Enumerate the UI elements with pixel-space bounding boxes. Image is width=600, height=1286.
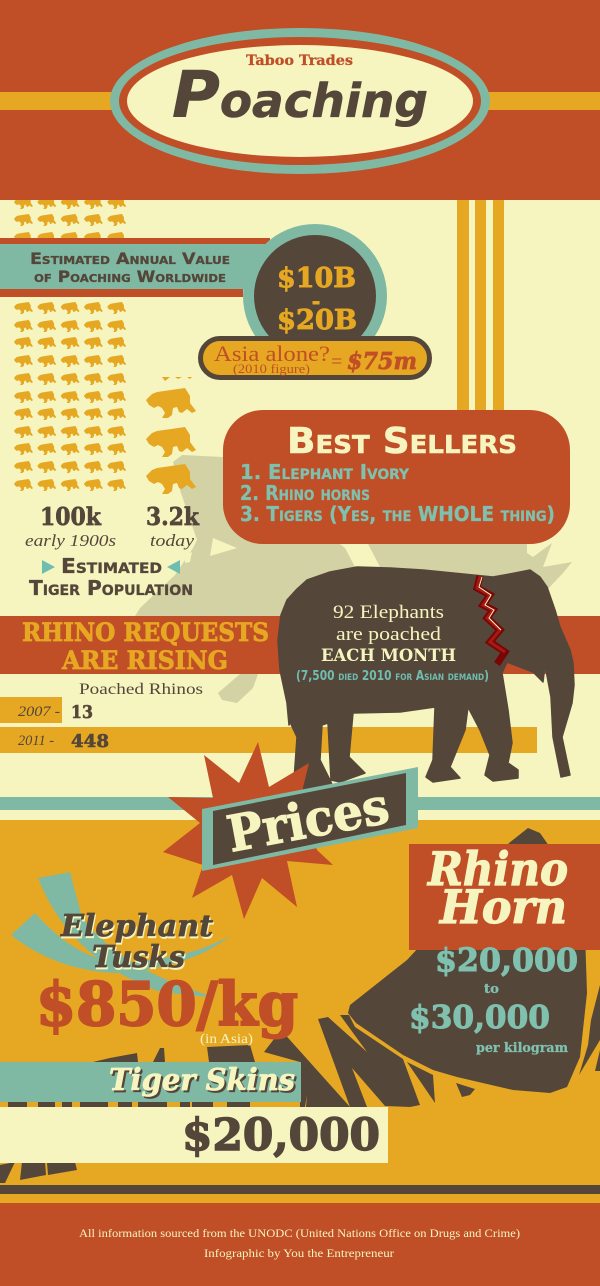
- rhino requests heading: RHINO REQUESTS: [22, 618, 269, 647]
- elephant tusks heading: Elephant: [61, 911, 214, 946]
- tiger population stats: 3.2k: [146, 502, 200, 531]
- Asia callout pill: $75m: [347, 348, 417, 375]
- elephant wound zigzag: [477, 576, 505, 664]
- value circle: -: [312, 289, 320, 313]
- starburst: [163, 742, 333, 919]
- rhino horn prices: to: [484, 982, 499, 997]
- rhino jaw and spikes: [318, 1015, 420, 1107]
- tiger population stats: [25, 502, 200, 600]
- tiger skins band: Tiger Skins: [109, 1063, 295, 1098]
- footer: All information sourced from the UNODC (United Nations Office on Drugs and Crime): [79, 1226, 520, 1240]
- title: Poaching: [172, 59, 428, 133]
- rhino horn box: Horn: [438, 880, 567, 934]
- rhino head silhouette: [0, 828, 600, 1183]
- elephant tusks heading: [60, 909, 214, 977]
- ribbon text: of Poaching Worldwide: [34, 267, 226, 286]
- tiger population stats: 100k: [40, 502, 102, 531]
- poached rhinos bars: [0, 681, 537, 753]
- rhino horn box: Rhino: [426, 842, 568, 896]
- best sellers panel: [223, 410, 570, 544]
- teal strip: [0, 797, 600, 810]
- elephant tusk price: (in Asia): [200, 1032, 253, 1047]
- red band: [0, 616, 600, 674]
- rhino horn prices: $20,000: [435, 941, 578, 979]
- tiger population stats: early 1900s: [25, 531, 116, 550]
- elephant: [278, 567, 574, 795]
- annual value ribbon: [0, 238, 270, 297]
- ribbon text: [30, 249, 230, 286]
- elephant text: are poached: [336, 624, 442, 645]
- prices banner: Prices: [222, 776, 393, 864]
- value circle: $20B: [277, 305, 357, 336]
- rhino requests heading: ARE RISING: [61, 646, 228, 675]
- rhino horn box: [409, 842, 600, 950]
- elephant text: 92 Elephants: [333, 602, 444, 623]
- Asia callout pill: [200, 338, 430, 378]
- elephant text: (7,500 died 2010 for Asian demand): [296, 669, 489, 684]
- Asia callout pill: Asia alone?: [214, 341, 330, 366]
- header banner: [0, 0, 600, 200]
- Asia callout pill: (2010 figure): [233, 361, 310, 376]
- value circle: [243, 224, 387, 368]
- Asia callout pill: =: [331, 351, 342, 373]
- elephant tusks heading: Tusks: [93, 942, 186, 977]
- tiger skins price: $20,000: [182, 1110, 380, 1161]
- elephant tusk price: $850/kg: [36, 970, 298, 1040]
- poached rhinos bars: 2011 -: [18, 733, 54, 749]
- header kicker: Taboo Trades: [246, 53, 353, 69]
- vertical stripes: [457, 200, 504, 415]
- value circle: $10B: [277, 263, 356, 294]
- tusks: [11, 872, 230, 998]
- tiger population stats: Estimated: [61, 554, 162, 578]
- rhino horn prices: $30,000: [409, 998, 550, 1036]
- prices background: [0, 820, 600, 1203]
- background rhino silhouette: [130, 455, 572, 703]
- tiger skins band: [0, 1062, 301, 1102]
- tiger population stats: today: [150, 531, 195, 550]
- poached rhinos bars: 448: [71, 731, 109, 752]
- tiger population stats: Tiger Population: [29, 576, 193, 600]
- elephant tusks heading: Tusks: [92, 940, 185, 975]
- cream gaps in rhino silhouette: [185, 538, 237, 563]
- tiger population grid: 100k: [14, 197, 126, 491]
- rhino requests heading: [22, 618, 269, 675]
- best sellers panel: Best Sellers: [287, 421, 517, 462]
- poached rhinos bars: Poached Rhinos: [79, 681, 203, 698]
- footer: [0, 1203, 600, 1286]
- elephant text: [296, 602, 489, 684]
- best sellers panel: 2. Rhino horns: [240, 481, 370, 505]
- best sellers panel: 1. Elephant Ivory: [240, 460, 410, 484]
- tiger population icons: 3.2k: [146, 377, 196, 494]
- tiger skins band: Tiger Skins: [111, 1065, 297, 1100]
- elephant text: EACH MONTH: [321, 646, 456, 666]
- rhino horn prices: per kilogram: [476, 1041, 568, 1056]
- rhino horn prices: [409, 941, 578, 1056]
- poached rhinos bars: 2007 -: [18, 704, 60, 720]
- footer: Infographic by You the Entrepreneur: [204, 1246, 394, 1260]
- ribbon text: Estimated Annual Value: [30, 249, 230, 268]
- poached rhinos bars: 13: [71, 702, 93, 723]
- tiger skins price: [0, 1107, 388, 1163]
- elephant tusks heading: Elephant: [60, 909, 213, 944]
- best sellers panel: 3. Tigers (Yes, the WHOLE thing): [240, 502, 555, 526]
